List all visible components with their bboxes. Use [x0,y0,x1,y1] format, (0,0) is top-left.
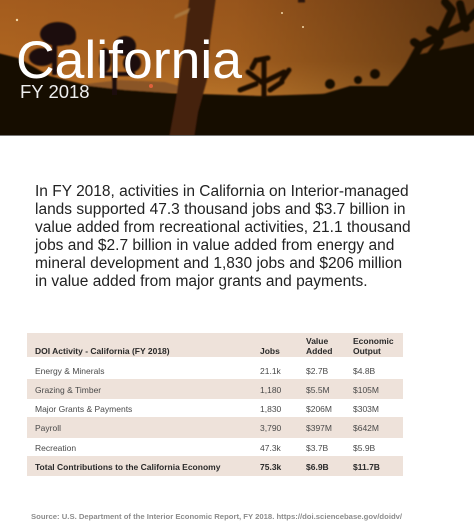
summary text block: lands supported 47.3 thousand jobs and $3.7 billion in [35,201,406,218]
row: payroll: Payroll [35,423,61,433]
small joshua tree [240,58,289,96]
table header [35,336,394,356]
banner: night desert photo with title [0,0,474,136]
summary text block: In FY 2018, activities in California on Interior-managed [35,183,409,200]
row: payroll: 3,790 [260,423,281,433]
row: recreation: Recreation [35,443,76,453]
row: total contributions: $11.7B [353,462,380,472]
distant mountain [85,80,200,94]
row: energy and minerals [35,366,375,376]
row: payroll [35,423,379,433]
row: grazing and timber [35,385,379,395]
stars [16,12,304,88]
source note: Source: U.S. Department of the Interior Economic Report, FY 2018. https://doi.sciencebase.gov/doidv/ [31,512,402,521]
summary text block: mineral development and 1,830 jobs and $206 million [35,255,402,272]
row: energy and minerals: $4.8B [353,366,375,376]
row: total contributions [35,462,380,472]
low shrubs and right joshua tree [320,40,474,110]
row: grazing and timber: $5.5M [306,385,330,395]
row: major grants and payments: Major Grants & Payments [35,404,132,414]
row: major grants and payments: 1,830 [260,404,281,414]
dark hills [0,50,474,150]
summary text block: jobs and $2.7 billion in value added from energy and [35,237,394,254]
row: recreation: 47.3k [260,443,281,453]
row: total contributions: 75.3k [260,462,281,472]
table header: Jobs [260,346,280,356]
middle joshua tree [99,36,141,95]
table header: Output [353,346,381,356]
row: major grants and payments: $206M [306,404,332,414]
row: grazing and timber: $105M [353,385,379,395]
row: grazing and timber: Grazing & Timber [35,385,101,395]
table header: Economic [353,336,394,346]
tree trunk [167,0,217,150]
row: major grants and payments: $303M [353,404,379,414]
row: recreation: $3.7B [306,443,328,453]
row: energy and minerals: 21.1k [260,366,281,376]
row: recreation [35,443,375,453]
table header: Added [306,346,332,356]
table header: DOI Activity - California (FY 2018) [35,346,170,356]
subtitle: FY 2018 [20,81,90,102]
summary text block: value added from recreational activities, 21.1 thousand [35,219,411,236]
row: total contributions: $6.9B [306,462,329,472]
row: energy and minerals: Energy & Minerals [35,366,104,376]
row: grazing and timber: 1,180 [260,385,281,395]
table header: Value [306,336,328,346]
row: payroll: $642M [353,423,379,433]
data table [27,333,403,476]
title: California [16,31,243,90]
row: recreation: $5.9B [353,443,375,453]
row: total contributions: Total Contributions to the California Economy [35,462,220,472]
row: energy and minerals: $2.7B [306,366,328,376]
row: major grants and payments [35,404,379,414]
summary text block [34,183,411,290]
row: payroll: $397M [306,423,332,433]
left joshua tree [29,22,76,75]
summary text block: in value added from major grants and payments. [35,273,368,290]
